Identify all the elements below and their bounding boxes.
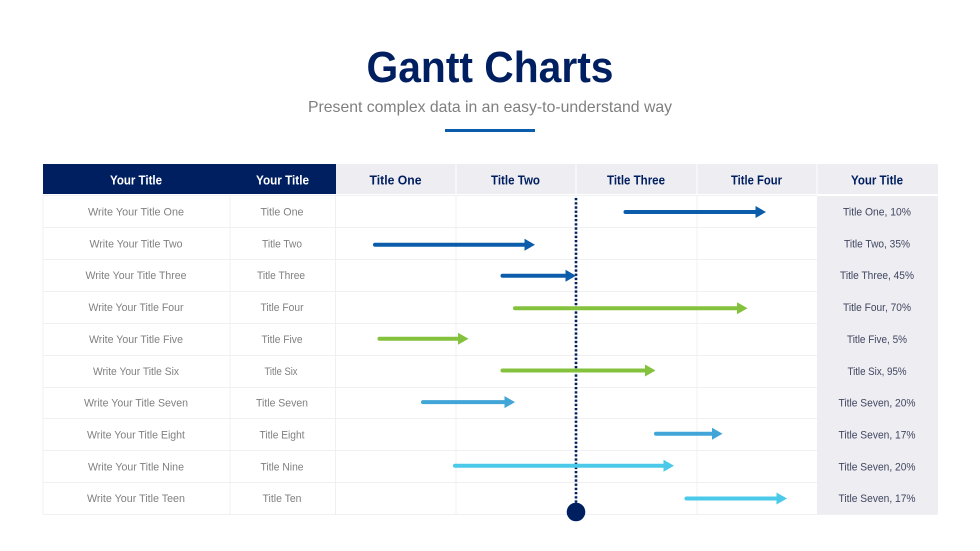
right column values: Title Seven, 20% — [838, 398, 916, 410]
right column values: Title Seven, 17% — [838, 493, 916, 505]
right column values: Title Seven, 20% — [838, 462, 916, 474]
second column labels: Title Eight — [260, 430, 304, 442]
second column labels: Title One — [260, 206, 304, 218]
table header: Your Title — [110, 172, 162, 188]
first column labels: Write Your Title Teen — [87, 493, 185, 505]
table grid — [43, 195, 938, 514]
table header: Your Title — [256, 172, 309, 188]
first column labels: Write Your Title Eight — [87, 430, 185, 442]
title underline — [445, 129, 535, 132]
right column values: Title Three, 45% — [840, 270, 914, 282]
table header: Title Three — [607, 172, 665, 188]
first column labels: Write Your Title Six — [93, 366, 179, 378]
second column labels: Title Ten — [262, 493, 302, 505]
first column labels: Write Your Title Three — [86, 270, 186, 282]
second column labels: Title Seven — [256, 398, 308, 410]
right column background — [817, 196, 938, 514]
right column values: Title Two, 35% — [844, 238, 910, 250]
arrow: row 1 — [624, 206, 766, 218]
right column values: Title Four, 70% — [843, 302, 911, 314]
subtitle: Present complex data in an easy-to-understand way — [308, 99, 672, 116]
table header: Title Two — [491, 172, 540, 188]
arrow: row 8 — [654, 428, 722, 440]
first column labels: Write Your Title Four — [88, 302, 184, 314]
arrow: row 9 — [453, 460, 674, 472]
second column labels: Title Four — [260, 302, 304, 314]
arrow: row 7 — [421, 396, 515, 408]
arrow: row 3 — [500, 270, 576, 282]
title: Gantt Charts — [366, 43, 614, 92]
second column labels — [256, 206, 308, 505]
table header: Your Title — [851, 172, 903, 188]
arrow: row 10 — [684, 492, 787, 504]
arrow: row 6 — [500, 364, 656, 376]
second column labels: Title Six — [264, 366, 298, 378]
right column values: Title One, 10% — [843, 206, 911, 218]
table header: Title One — [370, 172, 422, 188]
first column labels: Write Your Title Nine — [88, 462, 184, 474]
table header: Title Four — [731, 172, 782, 188]
table header — [43, 164, 938, 194]
second column labels: Title Three — [257, 270, 305, 282]
first column labels: Write Your Title Seven — [84, 398, 188, 410]
first column labels: Write Your Title Five — [89, 334, 183, 346]
arrow: row 5 — [378, 333, 468, 345]
today marker: circle — [567, 503, 585, 521]
right column values: Title Five, 5% — [847, 334, 907, 346]
second column labels: Title Five — [262, 334, 302, 346]
second column labels: Title Two — [262, 238, 302, 250]
today marker: dotted line — [575, 198, 577, 505]
first column labels: Write Your Title Two — [90, 238, 182, 250]
right column values: Title Six, 95% — [848, 366, 907, 378]
first column labels — [84, 206, 188, 505]
second column labels: Title Nine — [260, 462, 304, 474]
right column values: Title Seven, 17% — [838, 430, 916, 442]
right column values — [838, 206, 916, 505]
arrow: row 4 — [513, 302, 748, 314]
first column labels: Write Your Title One — [88, 206, 184, 218]
arrow: row 2 — [373, 239, 535, 251]
